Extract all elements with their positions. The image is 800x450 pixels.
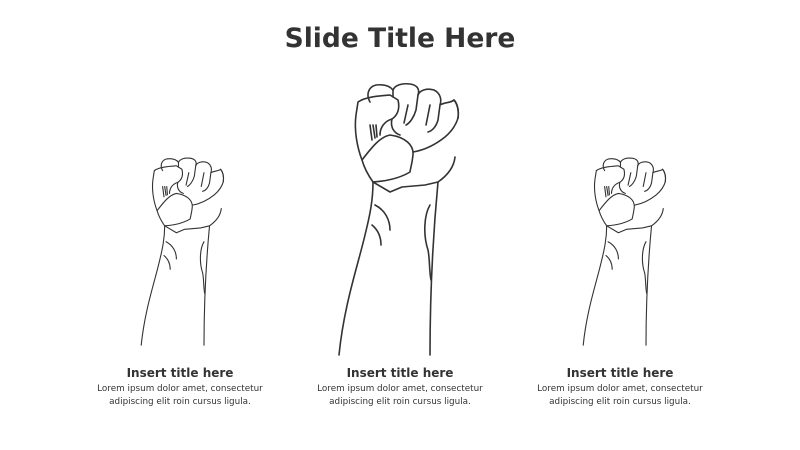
text block: left [97, 366, 263, 406]
text block: right [537, 366, 703, 406]
text block: right: Insert title here [567, 366, 673, 380]
text block: right: Lorem ipsum dolor amet, consectetur [537, 384, 703, 394]
text block: left: adipiscing elit roin cursus ligula. [109, 396, 251, 406]
icon: center fist [339, 84, 458, 355]
text block: left: Lorem ipsum dolor amet, consectetur [97, 384, 263, 394]
text block: left: Insert title here [127, 366, 233, 380]
icon: right fist [583, 158, 666, 345]
icon: left fist [141, 158, 224, 345]
text block: center: Insert title here [347, 366, 453, 380]
text block: right: adipiscing elit roin cursus ligula. [549, 396, 691, 406]
title: Slide Title Here [285, 23, 515, 54]
text block: center: Lorem ipsum dolor amet, consectetur [317, 384, 483, 394]
text block: center: adipiscing elit roin cursus ligula. [329, 396, 471, 406]
text block: center [317, 366, 483, 406]
